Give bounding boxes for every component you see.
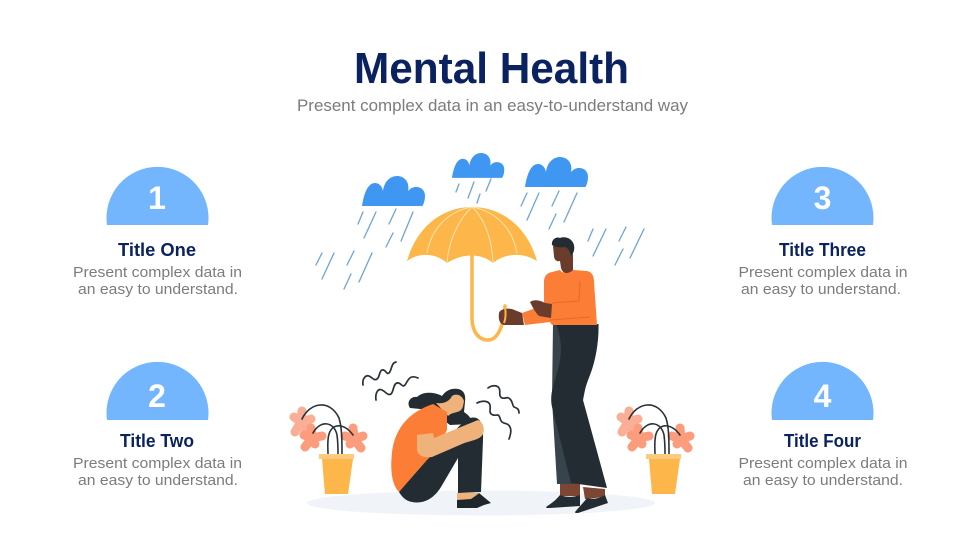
text: description one: an easy to understand. xyxy=(78,281,238,298)
badge: number 1: 1 xyxy=(148,180,166,216)
text: description two xyxy=(73,455,242,489)
icon: left cloud xyxy=(362,176,425,206)
text: description two: Present complex data in xyxy=(73,455,242,472)
subtitle: Present complex data in an easy-to-understand way xyxy=(297,96,688,115)
heading: title two: Title Two xyxy=(120,431,194,451)
text: description one: Present complex data in xyxy=(73,264,242,281)
icon: right plant xyxy=(621,405,690,494)
text: description three: Present complex data in xyxy=(738,264,908,281)
text: description four: Present complex data in xyxy=(738,455,908,472)
badge: number 1 xyxy=(107,167,208,225)
text: description three: an easy to understand. xyxy=(741,281,901,298)
text: description four xyxy=(738,455,908,489)
badge: number 2 xyxy=(106,362,208,420)
panel: title one xyxy=(73,167,242,298)
illustration: sitting woman xyxy=(391,389,491,508)
badge: number 3 xyxy=(772,167,874,225)
title: Mental Health xyxy=(354,44,629,93)
panel: title three xyxy=(738,167,908,298)
icon: stress squiggles xyxy=(363,362,519,439)
heading: title one: Title One xyxy=(118,240,196,260)
heading: title three: Title Three xyxy=(779,240,866,260)
panel: title four xyxy=(738,362,908,489)
icon: right cloud xyxy=(525,157,588,187)
badge: number 4: 4 xyxy=(814,378,832,414)
illustration: ground shadow xyxy=(307,490,655,516)
icon: middle cloud xyxy=(452,153,504,178)
text: description four: an easy to understand. xyxy=(743,472,903,489)
text: description three xyxy=(738,264,908,298)
badge: number 2: 2 xyxy=(148,378,166,414)
panel: title two xyxy=(73,362,242,489)
icon: umbrella xyxy=(407,207,537,340)
illustration: standing man xyxy=(499,237,608,513)
badge: number 4 xyxy=(772,362,874,420)
heading: title four: Title Four xyxy=(784,431,861,451)
icon: left plant xyxy=(294,405,363,494)
text: description one xyxy=(73,264,242,298)
badge: number 3: 3 xyxy=(814,180,831,216)
text: description two: an easy to understand. xyxy=(78,472,238,489)
icon: rain xyxy=(316,179,644,289)
